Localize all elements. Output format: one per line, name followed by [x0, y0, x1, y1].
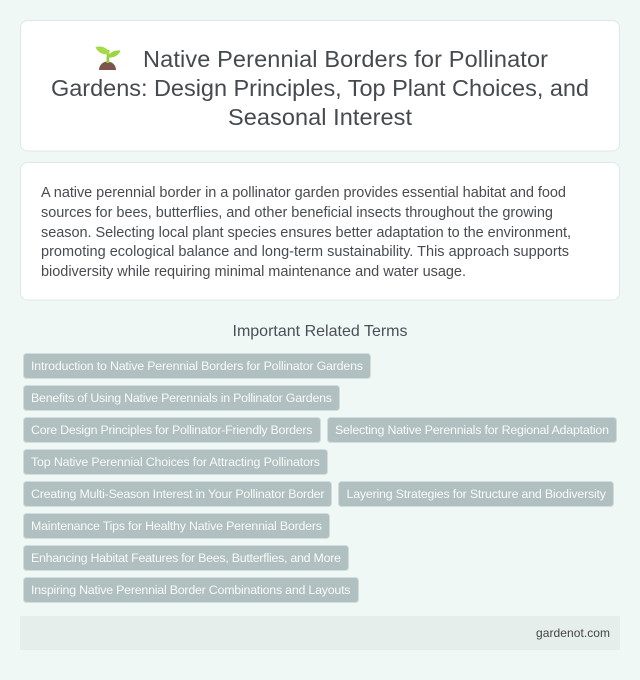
tag: border combinations: [24, 578, 358, 602]
footer source text: gardenot.com: [536, 626, 610, 640]
tag: maintenance tips: [24, 514, 330, 538]
intro paragraph text: promoting ecological balance and long-term sustainability. This approach supports: [41, 244, 569, 260]
title: Gardens: Design Principles, Top Plant Choices, and: [51, 75, 589, 101]
tag: habitat features: [24, 546, 348, 570]
tag: benefits: Benefits of Using Native Perennials in Pollinator Gardens: [31, 391, 332, 405]
tag: maintenance tips: Maintenance Tips for Healthy Native Perennial Borders: [31, 519, 322, 533]
tag: layering strategies: [338, 482, 614, 506]
tag: border combinations: Inspiring Native Perennial Border Combinations and Layouts: [31, 583, 350, 597]
panel: intro paragraph card: [20, 162, 620, 300]
heading: important related terms: Important Related Terms: [232, 323, 408, 340]
footer bar: [20, 616, 620, 650]
title: Seasonal Interest: [228, 104, 412, 130]
tag: selecting native perennials: [328, 418, 616, 442]
tag: layering strategies: Layering Strategies for Structure and Biodiversity: [346, 487, 607, 501]
intro paragraph text: biodiversity while requiring minimal maintenance and water usage.: [41, 264, 466, 280]
panel: related term tags: [24, 354, 616, 602]
intro paragraph text: season. Selecting local plant species ensures better adaptation to the environment,: [41, 225, 571, 241]
intro paragraph text: sources for bees, butterflies, and other beneficial insects throughout the growing: [41, 205, 553, 221]
intro paragraph text: A native perennial border in a pollinator garden provides essential habitat and food: [41, 185, 566, 201]
tag: benefits: [24, 386, 340, 410]
tag: introduction: Introduction to Native Perennial Borders for Pollinator Gardens: [31, 359, 363, 373]
tag: top native choices: [24, 450, 328, 474]
tag: introduction: [24, 354, 370, 378]
tag: core design principles: [24, 418, 320, 442]
tag: top native choices: Top Native Perennial Choices for Attracting Pollinators: [31, 455, 320, 469]
panel: title card: [20, 20, 620, 151]
intro paragraph text: [41, 185, 571, 280]
icon: seedling: [96, 46, 120, 70]
title: [51, 46, 589, 130]
tag: core design principles: Core Design Principles for Pollinator-Friendly Borders: [31, 423, 312, 437]
tag: habitat features: Enhancing Habitat Features for Bees, Butterflies, and More: [31, 551, 341, 565]
title: Native Perennial Borders for Pollinator: [143, 46, 548, 72]
tag: multi-season interest: [24, 482, 332, 506]
tag: multi-season interest: Creating Multi-Season Interest in Your Pollinator Border: [31, 487, 324, 501]
tag: selecting native perennials: Selecting Native Perennials for Regional Adaptation: [335, 423, 609, 437]
